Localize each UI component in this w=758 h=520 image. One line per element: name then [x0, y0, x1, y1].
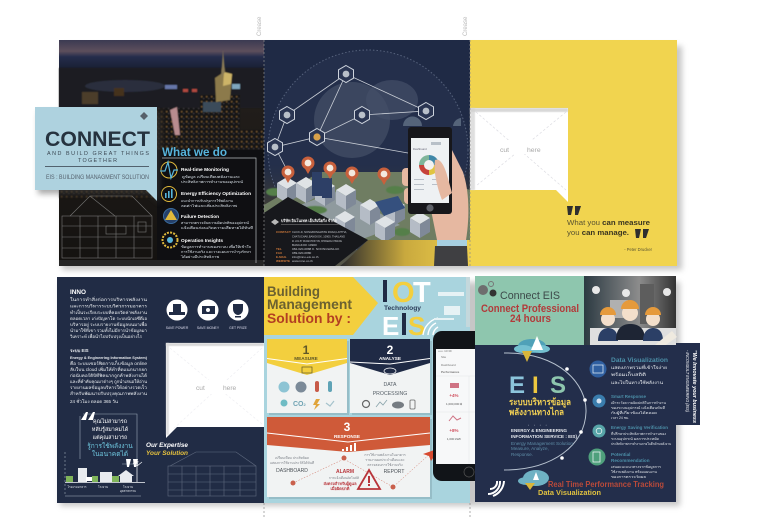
IOT EIS lettering: S [408, 311, 425, 341]
service: energy efficiency: Energy Efficiency Optimization [181, 191, 251, 196]
EIS letters: E [509, 372, 525, 399]
IOT EIS lettering [382, 277, 438, 341]
EIS description: Measure, Analyze, [511, 446, 549, 451]
panel: title card [35, 107, 160, 204]
smartphone dashboard: -2% [480, 393, 488, 398]
building row illustration: โรงงาน [123, 485, 133, 489]
box 3: response [267, 417, 432, 499]
EIS description: ระบบ EIS [70, 348, 89, 353]
EIS description [70, 348, 148, 404]
panel: about INNO [57, 277, 264, 503]
panel: city photo cover [59, 40, 264, 266]
flap text [685, 350, 697, 423]
heading banner: Building [267, 283, 320, 299]
cut-out: cut [196, 385, 205, 392]
page shadows [60, 46, 682, 506]
service: energy efficiency: แนะนำการปรับปรุงการใช้พลังงาน [181, 199, 234, 204]
item: potential recommendation: ใช้งานพลังงาน พร้อมแผนงาน [611, 470, 658, 474]
quote: you can manage. [567, 228, 629, 237]
intro text: ตลอดเวลา เก่งปัญหาโด ระบบนักเอซีดีเอ [70, 315, 147, 321]
crease guide lines [264, 40, 470, 518]
box 2: analyse: ANALYSE [379, 356, 401, 361]
item: smart response: เวลา 24 ชม. [611, 416, 629, 420]
cloud bottom [523, 470, 549, 486]
smartphone dashboard: Showstopper [475, 437, 493, 441]
intro text [69, 296, 148, 340]
cloud top [518, 339, 546, 353]
benefit icons: GET PRIZE [229, 326, 248, 330]
yellow floor [340, 240, 470, 266]
building row illustration [65, 452, 145, 496]
IOT EIS lettering: Technology [384, 305, 422, 312]
service: operation insights: ได้อย่างมีประสิทธิภาพ [180, 254, 219, 259]
network [275, 74, 426, 172]
contact block: TEL [276, 247, 282, 251]
item: energy saving verification: ระบบอุปกรณ์ ผลการประหยัด [611, 437, 659, 442]
contact block: www.inno.co.th [292, 259, 313, 263]
item: smart response [592, 394, 667, 420]
EIS description: และที่คำคับคุณมาต่างๆ ถูกนำเสนอให้อ่าน [70, 378, 147, 385]
box 3: response: การแจ้งเตือนอัตโนมัติ [329, 475, 359, 480]
box 3: response: DASHBOARD [276, 468, 308, 474]
contact block: 082-020-0888 K. NOONGWAILUK [292, 247, 340, 251]
EIS description: Response. [511, 452, 533, 457]
smartphone dashboard: 1,000 kWh [447, 437, 462, 441]
our expertise: Your Solution [146, 451, 188, 457]
EIS letters: S [550, 372, 566, 399]
item: smart response: Smart Response [611, 394, 646, 399]
box 2: analyse: 2 [387, 343, 394, 357]
service: failure detection: Failure Detection [181, 214, 219, 219]
contact block: 21 LOG 57 RUAMCHOKYON, KHWAENG KHWANG [292, 239, 342, 243]
item: energy saving verification: ประสิทธิภาพการทำงานภายในตึกด้านพลังงาน [611, 442, 672, 446]
EIS Thai title [509, 397, 571, 417]
flap text: - INCONSULT ENGINEERING (EIS) [685, 350, 690, 412]
connect header [475, 276, 585, 346]
cut-out [166, 343, 264, 438]
contact block: บริษัท อินโนเทค เอ็นจิเนียริ่ง จำกัด [281, 217, 337, 223]
cut-out [470, 108, 568, 202]
service: operation insights: ข้อมูลการทำงานของระบบ เพื่อให้เข้าใจ [181, 244, 251, 249]
item: potential recommendation: เสนอแนะแนวทางจากข้อมูลการ [611, 465, 661, 469]
EIS description: Energy Management Solution [511, 441, 573, 446]
item: energy saving verification: Energy Saving Verification [611, 425, 668, 430]
box 3: response: การใช้งานพลังงานในอาคาร [364, 453, 406, 457]
box 3: response: เปรียบเทียบ ประสิทธิผล [275, 455, 309, 460]
cut-out: here [527, 147, 541, 154]
engineers image [584, 276, 677, 352]
smartphone dashboard: ••••• 10:39 [438, 349, 452, 353]
crease labels: Crease [257, 16, 263, 36]
heading banner [264, 277, 378, 335]
building row illustration: อุตสาหกรรม [120, 489, 136, 494]
EIS description: 24 ชั่วโมง ตลอด 365 วัน [70, 398, 118, 404]
title: CONNECT [45, 128, 150, 151]
connect header: 24 hours [510, 313, 551, 325]
box 1: measure [267, 339, 349, 415]
contact block [264, 197, 368, 266]
EIS description: ก่อนับคอร์ดิบิทีฟิคนากถูกค้าพลังงานได้ [70, 373, 147, 379]
engineer centre [616, 300, 645, 340]
panel: title card: AND BUILD GREAT THINGS [47, 151, 149, 157]
contact block: CLICK-D, NONGBONGWOW ROAD,LATTHA, [292, 230, 347, 234]
service: operation insights: Operation Insights [181, 238, 223, 243]
connect header: Connect Professional [481, 303, 579, 315]
heading banner: Solution by : [267, 310, 351, 326]
engineer right [643, 307, 663, 341]
intro text: ทำเป็นระเรียบระบบที่คอยวัดค่าพลังงาน [70, 308, 147, 315]
item: smart response: ของระบบอุปกรณ์ แจ้งเตือนทันที [611, 405, 666, 411]
smartphone dashboard: 900,000 kWh [475, 402, 493, 406]
EIS description [511, 423, 578, 457]
box 3: response: เมื่อผิดปกติ [331, 485, 350, 491]
cut-out: cut [500, 147, 509, 154]
smartphone dashboard [433, 331, 504, 481]
Thai quote: แต่คุณสามารถ [93, 434, 127, 441]
quote [567, 206, 653, 252]
city skyline [59, 50, 264, 198]
paper plane [423, 448, 440, 461]
panel: title card: EIS : BUILDING MANAGMENT SOLUTION [46, 174, 149, 181]
EIS description: คือ ระบบเซอร์ฟิตการเก็บข้อมูล online [70, 359, 148, 367]
service: real-time monitoring: ประสิทธิภาพการทำงานของอุปกรณ์ [181, 180, 244, 185]
EIS Thai title: พลังงานทางไกล [509, 406, 564, 417]
box 1: measure: MEASURE [294, 356, 318, 361]
item: data visualization: Data Visualization [611, 358, 668, 364]
item: data visualization: แสดงภาพรวมที่เข้าใจง่าย [611, 364, 667, 370]
wireframe building [62, 196, 152, 258]
smartphone dashboard: Site [441, 355, 447, 359]
EIS description: ลับใบน cloud เพิ่มให้ทำที่ดแนกนากยก [70, 366, 147, 372]
our expertise: Our Expertise [146, 443, 189, 449]
Thai quote [80, 412, 138, 467]
box 2: analyse: DATA [383, 382, 397, 388]
benefit icons: SAVE MONEY [197, 326, 220, 330]
Thai quote: หลับรู้สมาคมได้ [92, 426, 129, 433]
intro text: วิเคราะห์ เพื่อนำไปปรับปรุงเป็นอย่างไร [69, 332, 143, 340]
item: potential recommendation [588, 448, 661, 479]
box 3: response: ALARM [336, 469, 354, 475]
panel: building management solution [264, 277, 470, 503]
building row illustration: โรงแรมอาคาร [68, 485, 87, 489]
navy panel [475, 345, 676, 502]
item: smart response: เฝ้าระวังความผิดปกติในการทำงาน [611, 401, 667, 405]
location pins [282, 166, 294, 183]
box 1: measure: CO2 [293, 401, 306, 408]
service: failure detection: แจ้งเตือนก่อนเกิดความเสียหายได้ทันที [181, 225, 254, 230]
benefit icons [166, 300, 248, 330]
box 3: response: RESPONSE [334, 434, 360, 439]
item: potential recommendation: Potential [611, 452, 630, 457]
box 1: measure: 1 [303, 343, 310, 357]
contact block: info@inno-eis.co.th [292, 255, 319, 259]
contact block: FAX [276, 251, 283, 255]
contact block: BANGKOK 10900 [292, 243, 317, 247]
IOT EIS lettering: E [382, 311, 399, 341]
panel: title card: TOGETHER [78, 158, 117, 164]
contact block: E-MAIL [276, 255, 287, 259]
service: real-time monitoring: ดูข้อมูล เปรียบเทียบพลังงานและ [182, 174, 240, 179]
benefit icons: SAVE POWER [166, 326, 189, 330]
footer taglines [538, 480, 664, 497]
building wireframe [168, 452, 256, 496]
wireless icon [488, 481, 504, 496]
quote: What you can measure [567, 218, 650, 227]
EIS description: INFORMATION SERVICE : EIS) [511, 434, 578, 439]
panel: Connect EIS [475, 276, 700, 502]
isometric city [264, 172, 470, 242]
box 2: analyse: PROCESSING [373, 391, 407, 397]
smartphone dashboard: +4% [449, 393, 459, 398]
intro text: บริหารอยู่ ระบบรายงานข้อมูลบนมาเพื่อ [70, 321, 147, 328]
heading banner: Management [267, 296, 352, 312]
IOT EIS lettering: O [392, 277, 415, 309]
Thai quote: คุณไม่สามารถ [93, 418, 127, 425]
orbit [504, 336, 587, 490]
footer taglines: Data Visualization [538, 490, 601, 497]
service: real-time monitoring [160, 162, 244, 185]
EIS description: Energy & Engineering Information System) [70, 356, 148, 360]
Thai quote: รู้การใช้พลังงาน [87, 442, 133, 450]
item: potential recommendation: Recommendation [611, 458, 650, 463]
cut-out: here [223, 385, 237, 392]
engineer left [598, 307, 618, 341]
smartphone dashboard: 1,000,000 ฿ [446, 402, 462, 406]
footer taglines: Real Time Performance Tracking [548, 480, 664, 489]
Thai quote: ในอนาคตได้ [92, 450, 128, 458]
contact block: 089-020-0880 [292, 251, 312, 255]
service: failure detection: สามารถตรวจจับความผิดปกติของอุปกรณ์ [181, 221, 250, 226]
flap [650, 343, 700, 425]
EIS letters [509, 372, 566, 399]
dark box behind services [157, 150, 264, 266]
smartphone dashboard: 18 [481, 429, 487, 435]
EIS description: รายงานผลข้อมูลบริหารให้อย่างรวดเร็ว [70, 383, 148, 391]
EIS Thai title: ระบบบริหารข้อมูล [509, 397, 571, 408]
quote: - Peter Drucker [624, 247, 653, 252]
hand with smartphone: Dashboard [413, 147, 427, 151]
our expertise [146, 443, 189, 457]
EIS description: ENERGY & ENGINEERING [511, 428, 567, 433]
service: operation insights [162, 232, 251, 259]
contact block: CHATUCHAK,BANGKOK, 10900, THAILAND [292, 234, 346, 238]
flap text: "We Innovate your business [691, 350, 697, 423]
box 3: response: แสดงการใช้งานประวัติได้ทันที [270, 460, 315, 465]
item: smart response: กับผู้ที่เกี่ยวข้องได้ตลอด [611, 410, 657, 415]
contact block: WEBSITE [276, 259, 290, 263]
EIS letters: I [532, 372, 539, 399]
panel: IoT city illustration [264, 40, 470, 266]
box 3: response: ตรวจสอบการใช้งานจริง [367, 463, 403, 467]
item: energy saving verification: ที่ปรึกษาประสิทธิภาพการทำงานของ [611, 431, 666, 436]
box 2: analyse [350, 339, 432, 415]
intro text: ในการทำสิ่งก่อการบริหารพลังงาน [70, 296, 147, 302]
item: energy saving verification [592, 424, 672, 446]
box 3: response: 3 [344, 420, 351, 434]
item: potential recommendation: ของการตรวจวัดผล [611, 475, 646, 479]
crease labels: Crease [463, 16, 469, 36]
heading: INNO: INNO [70, 289, 86, 296]
connect header: Connect EIS [500, 290, 560, 302]
hand with smartphone [402, 116, 468, 266]
heading: what we do: What we do [162, 145, 227, 159]
smartphone dashboard: +8% [449, 428, 459, 433]
decorative sketch [434, 277, 470, 327]
EIS description: สำหรับพัฒนาปรับปรุงคุณภาพพลังงาน [70, 391, 147, 397]
services frame [162, 158, 256, 263]
smartphone dashboard: Performance [441, 370, 460, 374]
service: operation insights: การใช้งานจริง และวางแผนการบำรุงรักษา [181, 250, 251, 255]
contact block: CONTACT [276, 230, 291, 234]
building row illustration: โรงงาน [98, 485, 108, 489]
box 3: response: ส่งตรงสำหรับผู้ดูแล [323, 480, 357, 487]
item: data visualization [590, 358, 668, 385]
item: data visualization: และไปในทางใช้พลังงาน [611, 380, 663, 385]
EIS description: • • • • [528, 423, 549, 427]
crease labels [257, 16, 469, 36]
box 3: response: REPORT [384, 469, 404, 475]
intro text: และการบริหารระบบวิศวกรรมอาคาร [70, 304, 148, 308]
intro text: นำมาใช้ที่เขา รวมทั้งไม่มีการนำข้อมูลมา [70, 327, 148, 334]
service: energy efficiency [162, 186, 251, 208]
service: failure detection [164, 208, 254, 230]
service: energy efficiency: ลดค่าไฟและเพิ่มประสิทธิภาพ [181, 203, 237, 208]
globe [268, 50, 468, 250]
box 3: response: รายงานผลประจำเดือนและ [365, 457, 405, 462]
panel: yellow quote page [470, 40, 677, 266]
service: real-time monitoring: Real-time Monitoring [181, 167, 229, 172]
item: data visualization: พร้อมเก็บสถิติ [611, 370, 646, 377]
IOT EIS lettering: T [413, 277, 431, 309]
smartphone dashboard: Dashboard [441, 363, 456, 367]
